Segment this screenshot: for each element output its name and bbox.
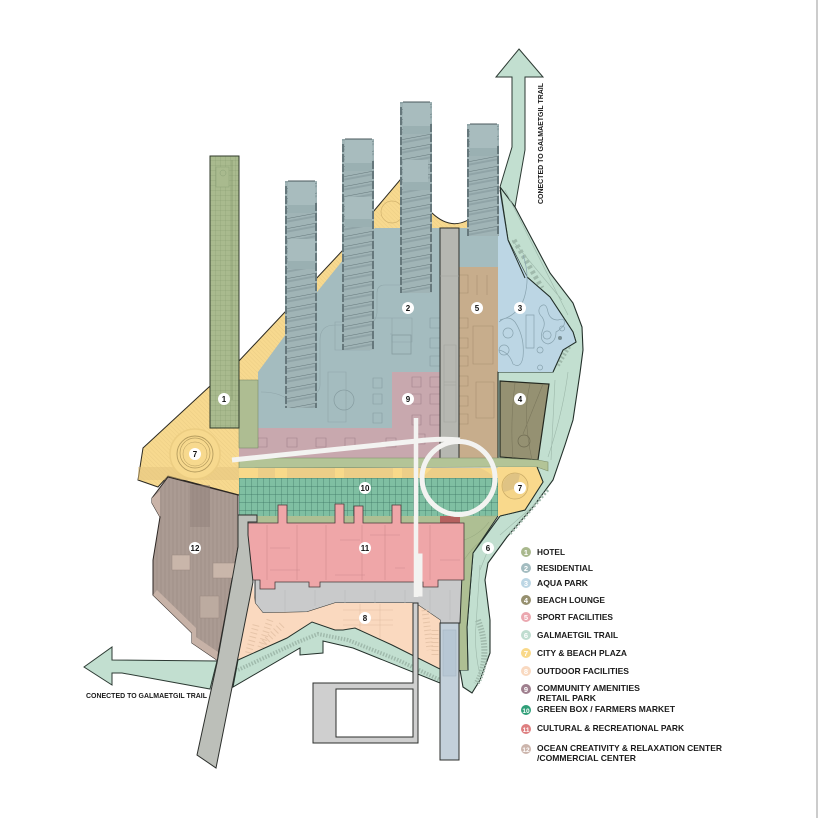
map number markers: 11 (361, 544, 370, 553)
map number markers (189, 302, 526, 624)
legend item: hotel: 1 (524, 548, 528, 557)
north arrow label: CONECTED TO GALMAETGIL TRAIL (538, 82, 545, 204)
legend item: green box: 10 (522, 708, 530, 715)
legend item: ocean creativity center (521, 743, 722, 763)
grey outdoor pool pier (313, 603, 418, 743)
legend item: hotel: HOTEL (537, 547, 565, 557)
grey promenade (255, 575, 462, 623)
zone 7: city and beach plaza, east (498, 467, 543, 516)
map number markers: 7 (193, 450, 198, 459)
legend item: Galmaetgil trail: GALMAETGIL TRAIL (537, 630, 618, 640)
residential tower 2 (342, 139, 374, 350)
map number markers: 10 (361, 484, 370, 493)
map number markers: 8 (363, 614, 368, 623)
legend item: city and beach plaza: CITY & BEACH PLAZA (537, 648, 627, 658)
legend item: outdoor facilities: 8 (524, 667, 528, 676)
zone 7: city and beach plaza, west (138, 180, 470, 495)
legend item: beach lounge: 4 (524, 596, 529, 605)
west arrow label: CONECTED TO GALMAETGIL TRAIL (86, 693, 208, 700)
blue pier (440, 623, 459, 760)
map number markers: 12 (191, 544, 200, 553)
residential tower 3 (400, 102, 432, 293)
legend item: community amenities (521, 683, 640, 703)
map number markers: 3 (518, 304, 523, 313)
legend item: ocean creativity center: 12 (522, 747, 530, 754)
legend item: green box: GREEN BOX / FARMERS MARKET (537, 704, 676, 714)
map number markers: 9 (406, 395, 411, 404)
map number markers: 4 (518, 395, 523, 404)
map number markers: 6 (486, 544, 491, 553)
legend item: outdoor facilities: OUTDOOR FACILITIES (537, 666, 629, 676)
map number markers: 2 (406, 304, 411, 313)
legend item: cultural and recreational park: 11 (523, 727, 530, 734)
zone 6: Galmaetgil trail (460, 187, 583, 693)
legend item: Galmaetgil trail: 6 (524, 631, 528, 640)
zone 10: green box and farmers market (239, 478, 498, 516)
zone 8: outdoor facilities (238, 582, 440, 669)
legend item: city and beach plaza: 7 (524, 649, 528, 658)
zone 12: ocean creativity and commercial center (152, 477, 238, 660)
zone 2: residential base (258, 228, 498, 428)
map number markers: 1 (222, 395, 227, 404)
legend item: sport facilities: 5 (524, 613, 528, 622)
zone 4: beach lounge (500, 381, 549, 460)
zone 3: aqua park (498, 190, 576, 372)
zone 11: cultural and recreational park (248, 504, 464, 589)
plaza bands below bridge (239, 458, 548, 478)
residential tower 1 (285, 181, 317, 408)
legend item: hotel (521, 547, 565, 557)
legend item: community amenities: 9 (524, 685, 528, 694)
olive strips under market (257, 516, 498, 670)
legend item: sport facilities: SPORT FACILITIES (537, 612, 613, 622)
legend (521, 547, 722, 763)
zone 9: community amenities and retail park (239, 372, 440, 458)
map number markers: 5 (475, 304, 480, 313)
legend item: community amenities: COMMUNITY AMENITIES (537, 683, 640, 693)
legend item: ocean creativity center: OCEAN CREATIVITY & RELAXATION CENTER (537, 743, 722, 753)
legend item: community amenities: /RETAIL PARK (537, 693, 597, 703)
zone 1: hotel tower (210, 156, 239, 428)
grey central spine (440, 228, 459, 466)
legend item: beach lounge: BEACH LOUNGE (537, 595, 605, 605)
diagonal grey walkway (197, 515, 257, 768)
map number markers: 7 (518, 484, 523, 493)
zone 6: Galmaetgil trail, south branch (233, 622, 440, 687)
white elevated loop bridge (232, 418, 497, 597)
legend item: cultural and recreational park: CULTURAL & RECREATIONAL PARK (537, 723, 685, 733)
residential tower 4 (467, 124, 499, 236)
legend item: aqua park: 3 (524, 579, 528, 588)
legend item: residential: RESIDENTIAL (537, 563, 593, 573)
zone 5: sport facilities (459, 267, 498, 458)
legend item: ocean creativity center: /COMMERCIAL CENTER (537, 753, 636, 763)
arrow: north connection to Galmaetgil trail (496, 49, 543, 207)
hotel annex (239, 380, 258, 448)
legend item: residential: 2 (524, 564, 528, 573)
arrow: west connection to Galmaetgil trail (84, 647, 217, 689)
legend item: aqua park: AQUA PARK (537, 578, 589, 588)
